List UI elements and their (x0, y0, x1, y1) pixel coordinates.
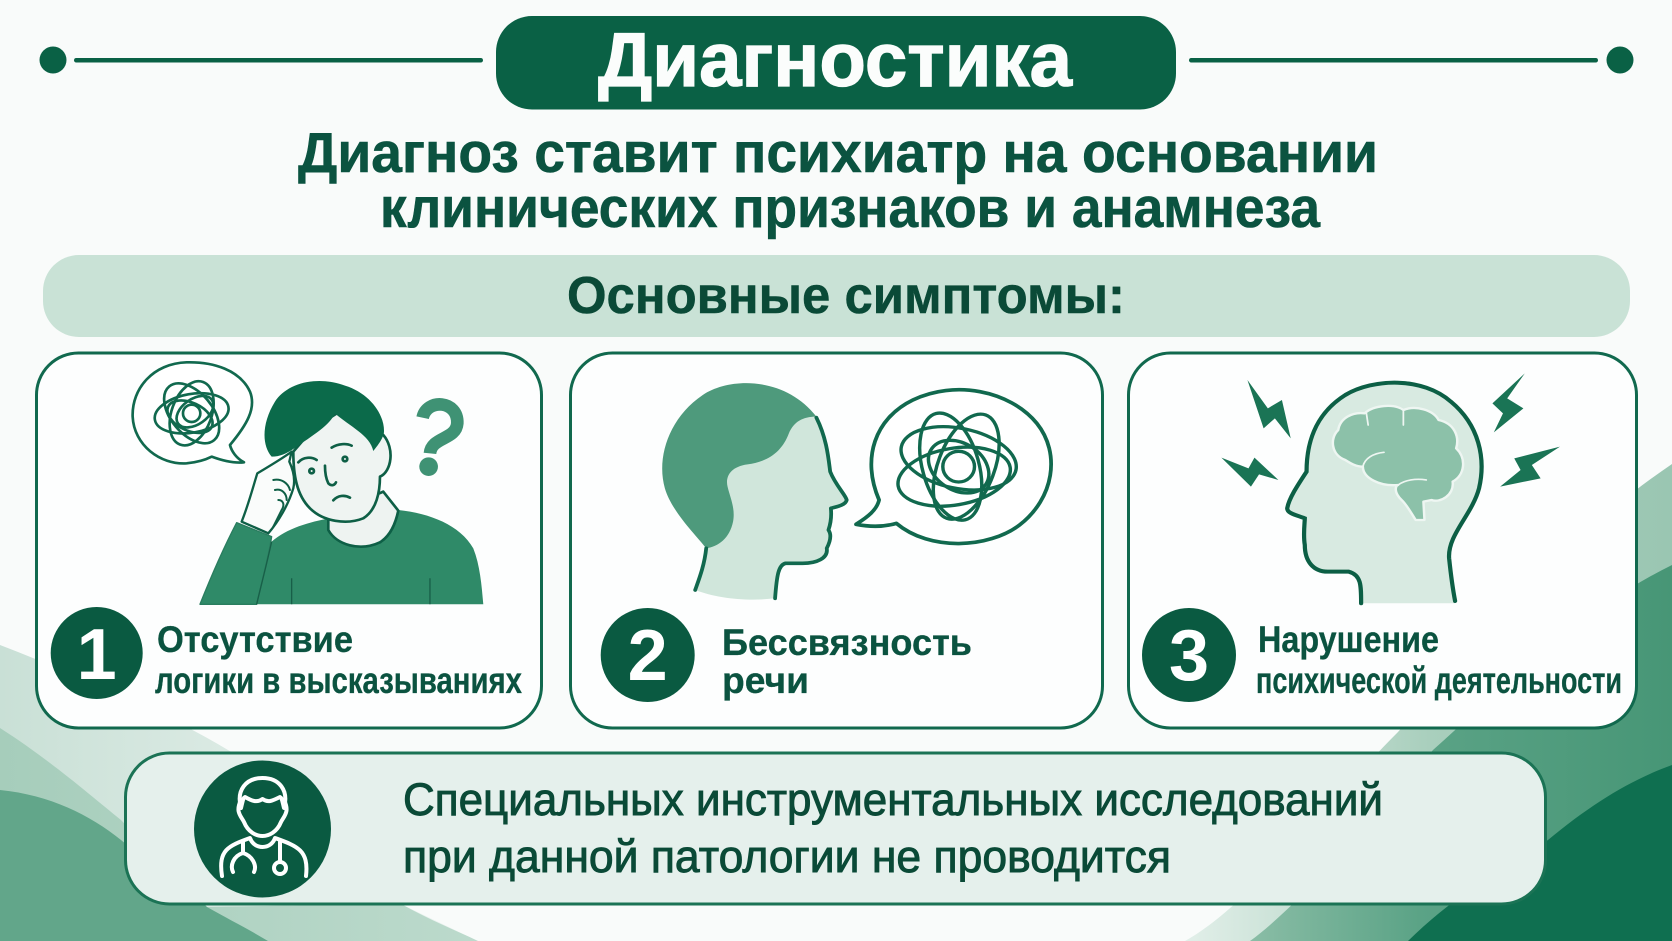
note text: Специальных инструментальных исследований (403, 774, 1383, 825)
label 1 (155, 619, 522, 701)
neck and collar (328, 492, 398, 547)
body (257, 510, 483, 604)
hand (242, 452, 294, 533)
speech bubble with tangled scribble (856, 390, 1051, 544)
section band: main symptoms (43, 255, 1630, 337)
icon: doctor (194, 760, 331, 898)
label 2: речи (722, 660, 809, 701)
hair (265, 381, 384, 457)
number badge 1 (51, 607, 143, 699)
label 1: логики в высказываниях (155, 660, 522, 701)
title pill: Диагностика (598, 18, 1073, 103)
subtitle: Диагноз ставит психиатр на основании (298, 121, 1378, 185)
illustration: head with brain and lightning bolts (1221, 373, 1560, 603)
panel: symptom 3 (1128, 353, 1636, 728)
sleeve (200, 523, 272, 604)
note text: при данной патологии не проводится (403, 831, 1171, 882)
illustration: confused person (133, 362, 483, 604)
lightning bolts (1221, 373, 1560, 487)
section band: main symptoms: Основные симптомы: (567, 267, 1125, 325)
head (1287, 383, 1482, 603)
thought bubble with tangled scribble (133, 362, 252, 463)
label 2: Бессвязность (722, 622, 972, 663)
number badge 3 (1142, 608, 1236, 702)
facial features (298, 444, 352, 500)
decorative header line: right (1189, 46, 1634, 74)
head (695, 395, 847, 600)
decorative header line: left (40, 46, 483, 74)
face (293, 405, 391, 522)
number badge 2: 2 (628, 616, 668, 696)
label 1: Отсутствие (157, 619, 353, 660)
subtitle (298, 121, 1378, 240)
illustration: profile head with speech bubble (662, 383, 1051, 600)
label 3: Нарушение (1258, 619, 1439, 660)
face outline (695, 418, 847, 598)
question mark (419, 404, 457, 476)
number badge 2 (601, 608, 695, 702)
hair (662, 383, 816, 548)
label 2 (722, 622, 972, 701)
title pill (496, 16, 1176, 110)
panel: note about instrumental studies (126, 753, 1546, 904)
subtitle: клинических признаков и анамнеза (380, 176, 1321, 240)
panel: symptom 2 (570, 353, 1102, 728)
number badge 3: 3 (1169, 616, 1209, 696)
panel: symptom 1 (36, 353, 542, 728)
number badge 1: 1 (77, 615, 117, 695)
brain (1333, 406, 1463, 520)
note text (403, 774, 1383, 882)
label 3 (1256, 619, 1622, 701)
